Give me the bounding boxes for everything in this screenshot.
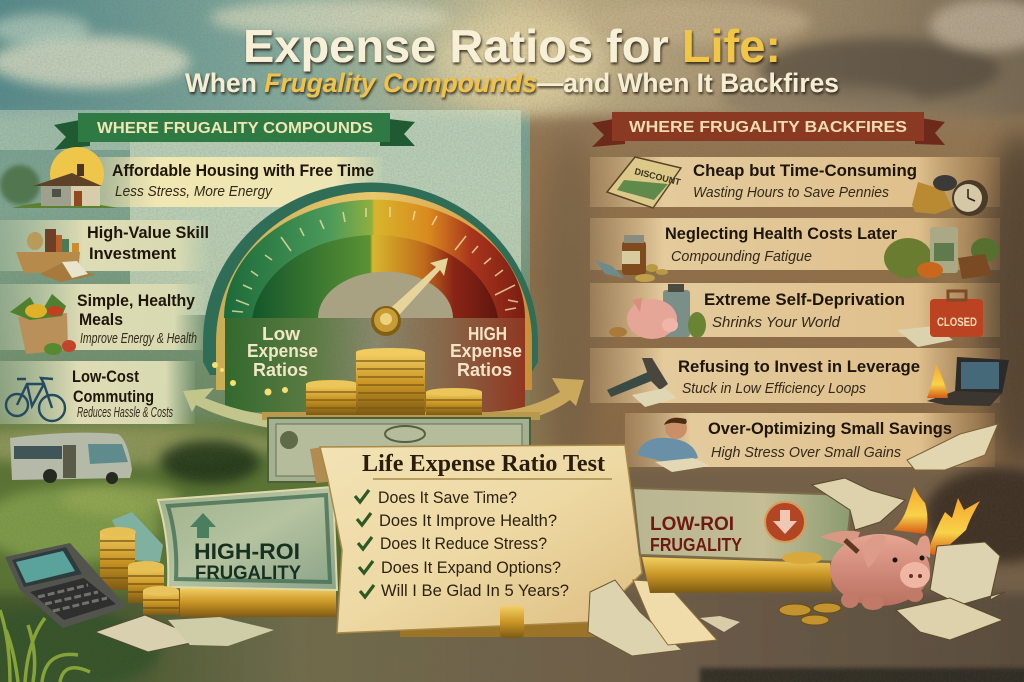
- bill: low-roi: [633, 488, 852, 562]
- bill: high-roi: [158, 487, 337, 590]
- item: high-value skill: [0, 220, 210, 282]
- gauge label: low expense ratios: [247, 324, 318, 380]
- gauge label: high expense ratios: [450, 324, 522, 380]
- item: refusing to invest: Refusing to Invest in Leverage: [678, 357, 920, 376]
- text: low-roi frugality: [650, 514, 742, 555]
- checklist: Does It Save Time?: [378, 488, 517, 507]
- item: simple healthy meals: Improve Energy & Health: [80, 330, 197, 347]
- item: neglecting health: [590, 218, 1000, 282]
- sparkles: [212, 362, 288, 396]
- small jar on scroll: [500, 606, 524, 638]
- item: neglecting health: Compounding Fatigue: [671, 248, 812, 265]
- crumpled papers centre: [588, 580, 740, 656]
- coin stack right: [426, 388, 482, 415]
- coin stack left: [306, 380, 358, 415]
- brown ground and right backdrop: [540, 468, 1024, 598]
- right list: frugality backfires: [590, 157, 1009, 472]
- gauge label: low expense ratios: Low: [262, 324, 301, 344]
- item: neglecting health: Neglecting Health Costs Later: [665, 224, 897, 243]
- gauge label: low expense ratios: Ratios: [253, 360, 308, 380]
- item: refusing to invest: [590, 348, 1009, 407]
- banner: where frugality compounds: WHERE FRUGALITY COMPOUNDS: [97, 120, 373, 137]
- gold base right: [642, 557, 832, 593]
- banner: where frugality backfires: [592, 112, 945, 147]
- banner: where frugality compounds: [54, 113, 415, 150]
- gauge needle: [371, 258, 448, 336]
- item: cheap but time-consuming: Wasting Hours to Save Pennies: [693, 184, 889, 201]
- checklist: [355, 479, 612, 600]
- gauge ticks: [232, 207, 518, 312]
- bill under coins: [262, 412, 540, 482]
- item: refusing to invest: Stuck in Low Efficiency Loops: [682, 380, 866, 397]
- gauge center hub: [318, 272, 453, 318]
- text: high-roi frugality: FRUGALITY: [195, 563, 301, 584]
- gauge outer dial band: [224, 200, 525, 318]
- coin on base: [782, 552, 822, 564]
- scroll fold: [310, 447, 330, 483]
- icon: calculator: [5, 543, 127, 628]
- coin stack middle: [356, 348, 425, 415]
- gauge frame: [203, 183, 538, 375]
- left list: frugality wins: [0, 147, 382, 424]
- gauge inner dial band: [252, 235, 498, 318]
- scroll gold bar: [400, 617, 595, 637]
- gold coin stacks: [306, 348, 482, 415]
- panel: low-roi frugality: [633, 488, 852, 593]
- icon: up arrow: [190, 513, 216, 538]
- gauge lower panel: [225, 318, 525, 412]
- checklist: Does It Improve Health?: [379, 511, 557, 530]
- item: low-cost commuting: Low-Cost: [72, 367, 139, 386]
- panel: high-roi frugality: [100, 487, 337, 617]
- item: cheap but time-consuming: DISCOUNT: [634, 166, 682, 187]
- item: cheap but time-consuming: [590, 157, 1000, 216]
- title: When Frugality Compounds—and When It Backfires: [185, 68, 839, 98]
- item: simple healthy meals: Simple, Healthy: [77, 291, 195, 310]
- grass foreground: [0, 610, 90, 682]
- item: high-value skill: Investment: [89, 244, 176, 263]
- item: over-optimizing: High Stress Over Small Gains: [711, 444, 901, 461]
- checklist: Does It Expand Options?: [381, 558, 561, 577]
- title: [185, 20, 839, 98]
- item: low-cost commuting: Commuting: [73, 387, 154, 406]
- icon: bus: [10, 433, 132, 484]
- text: high-roi frugality: [194, 539, 301, 584]
- gold base left: [180, 588, 336, 617]
- gauge label: low expense ratios: Expense: [247, 341, 318, 361]
- item: low-cost commuting: [0, 361, 195, 424]
- item: low-cost commuting: Reduces Hassle & Costs: [77, 404, 173, 421]
- item: simple healthy meals: Meals: [79, 310, 123, 329]
- gauge label: high expense ratios: Ratios: [457, 360, 512, 380]
- scattered coins: [779, 603, 841, 625]
- item: extreme self-deprivation: Extreme Self-Deprivation: [704, 290, 905, 309]
- item: affordable housing: Affordable Housing with Free Time: [112, 161, 374, 180]
- item: extreme self-deprivation: Shrinks Your World: [712, 314, 841, 331]
- text: high-roi frugality: HIGH-ROI: [194, 539, 300, 564]
- papers left: [95, 615, 274, 652]
- scroll heading: Life Expense Ratio Test: [362, 451, 605, 477]
- sweeping gold arrows: [183, 378, 584, 428]
- item: affordable housing: [0, 147, 382, 208]
- icon: piggy bank: [820, 531, 930, 610]
- flames and burnt papers: [812, 478, 1005, 640]
- panel: life expense ratio test: [310, 445, 642, 638]
- item: affordable housing: Less Stress, More Energy: [115, 183, 273, 200]
- gauge label: high expense ratios: Expense: [450, 341, 522, 361]
- gauge label: high expense ratios: HIGH: [468, 324, 507, 344]
- item: extreme self-deprivation: [590, 283, 1000, 347]
- text: low-roi frugality: FRUGALITY: [650, 535, 742, 555]
- green meadow: [0, 425, 340, 615]
- icon: down arrow: [765, 502, 805, 542]
- item: over-optimizing: Over-Optimizing Small Savings: [708, 419, 952, 438]
- item: high-value skill: High-Value Skill: [87, 223, 209, 242]
- checklist: Will I Be Glad In 5 Years?: [381, 581, 569, 600]
- banner: where frugality backfires: WHERE FRUGALITY BACKFIRES: [629, 119, 907, 136]
- item: extreme self-deprivation: CLOSED: [937, 315, 977, 329]
- gauge: [203, 183, 538, 412]
- scroll sheet: [320, 445, 642, 633]
- text: low-roi frugality: LOW-ROI: [650, 514, 734, 535]
- checklist: Does It Reduce Stress?: [380, 534, 547, 553]
- coin stacks left: [100, 527, 179, 615]
- title: Expense Ratios for Life:: [243, 20, 781, 72]
- item: over-optimizing: [625, 413, 998, 472]
- crumpled green bill: [112, 512, 163, 562]
- item: simple healthy meals: [0, 284, 205, 355]
- item: cheap but time-consuming: Cheap but Time-Consuming: [693, 161, 917, 180]
